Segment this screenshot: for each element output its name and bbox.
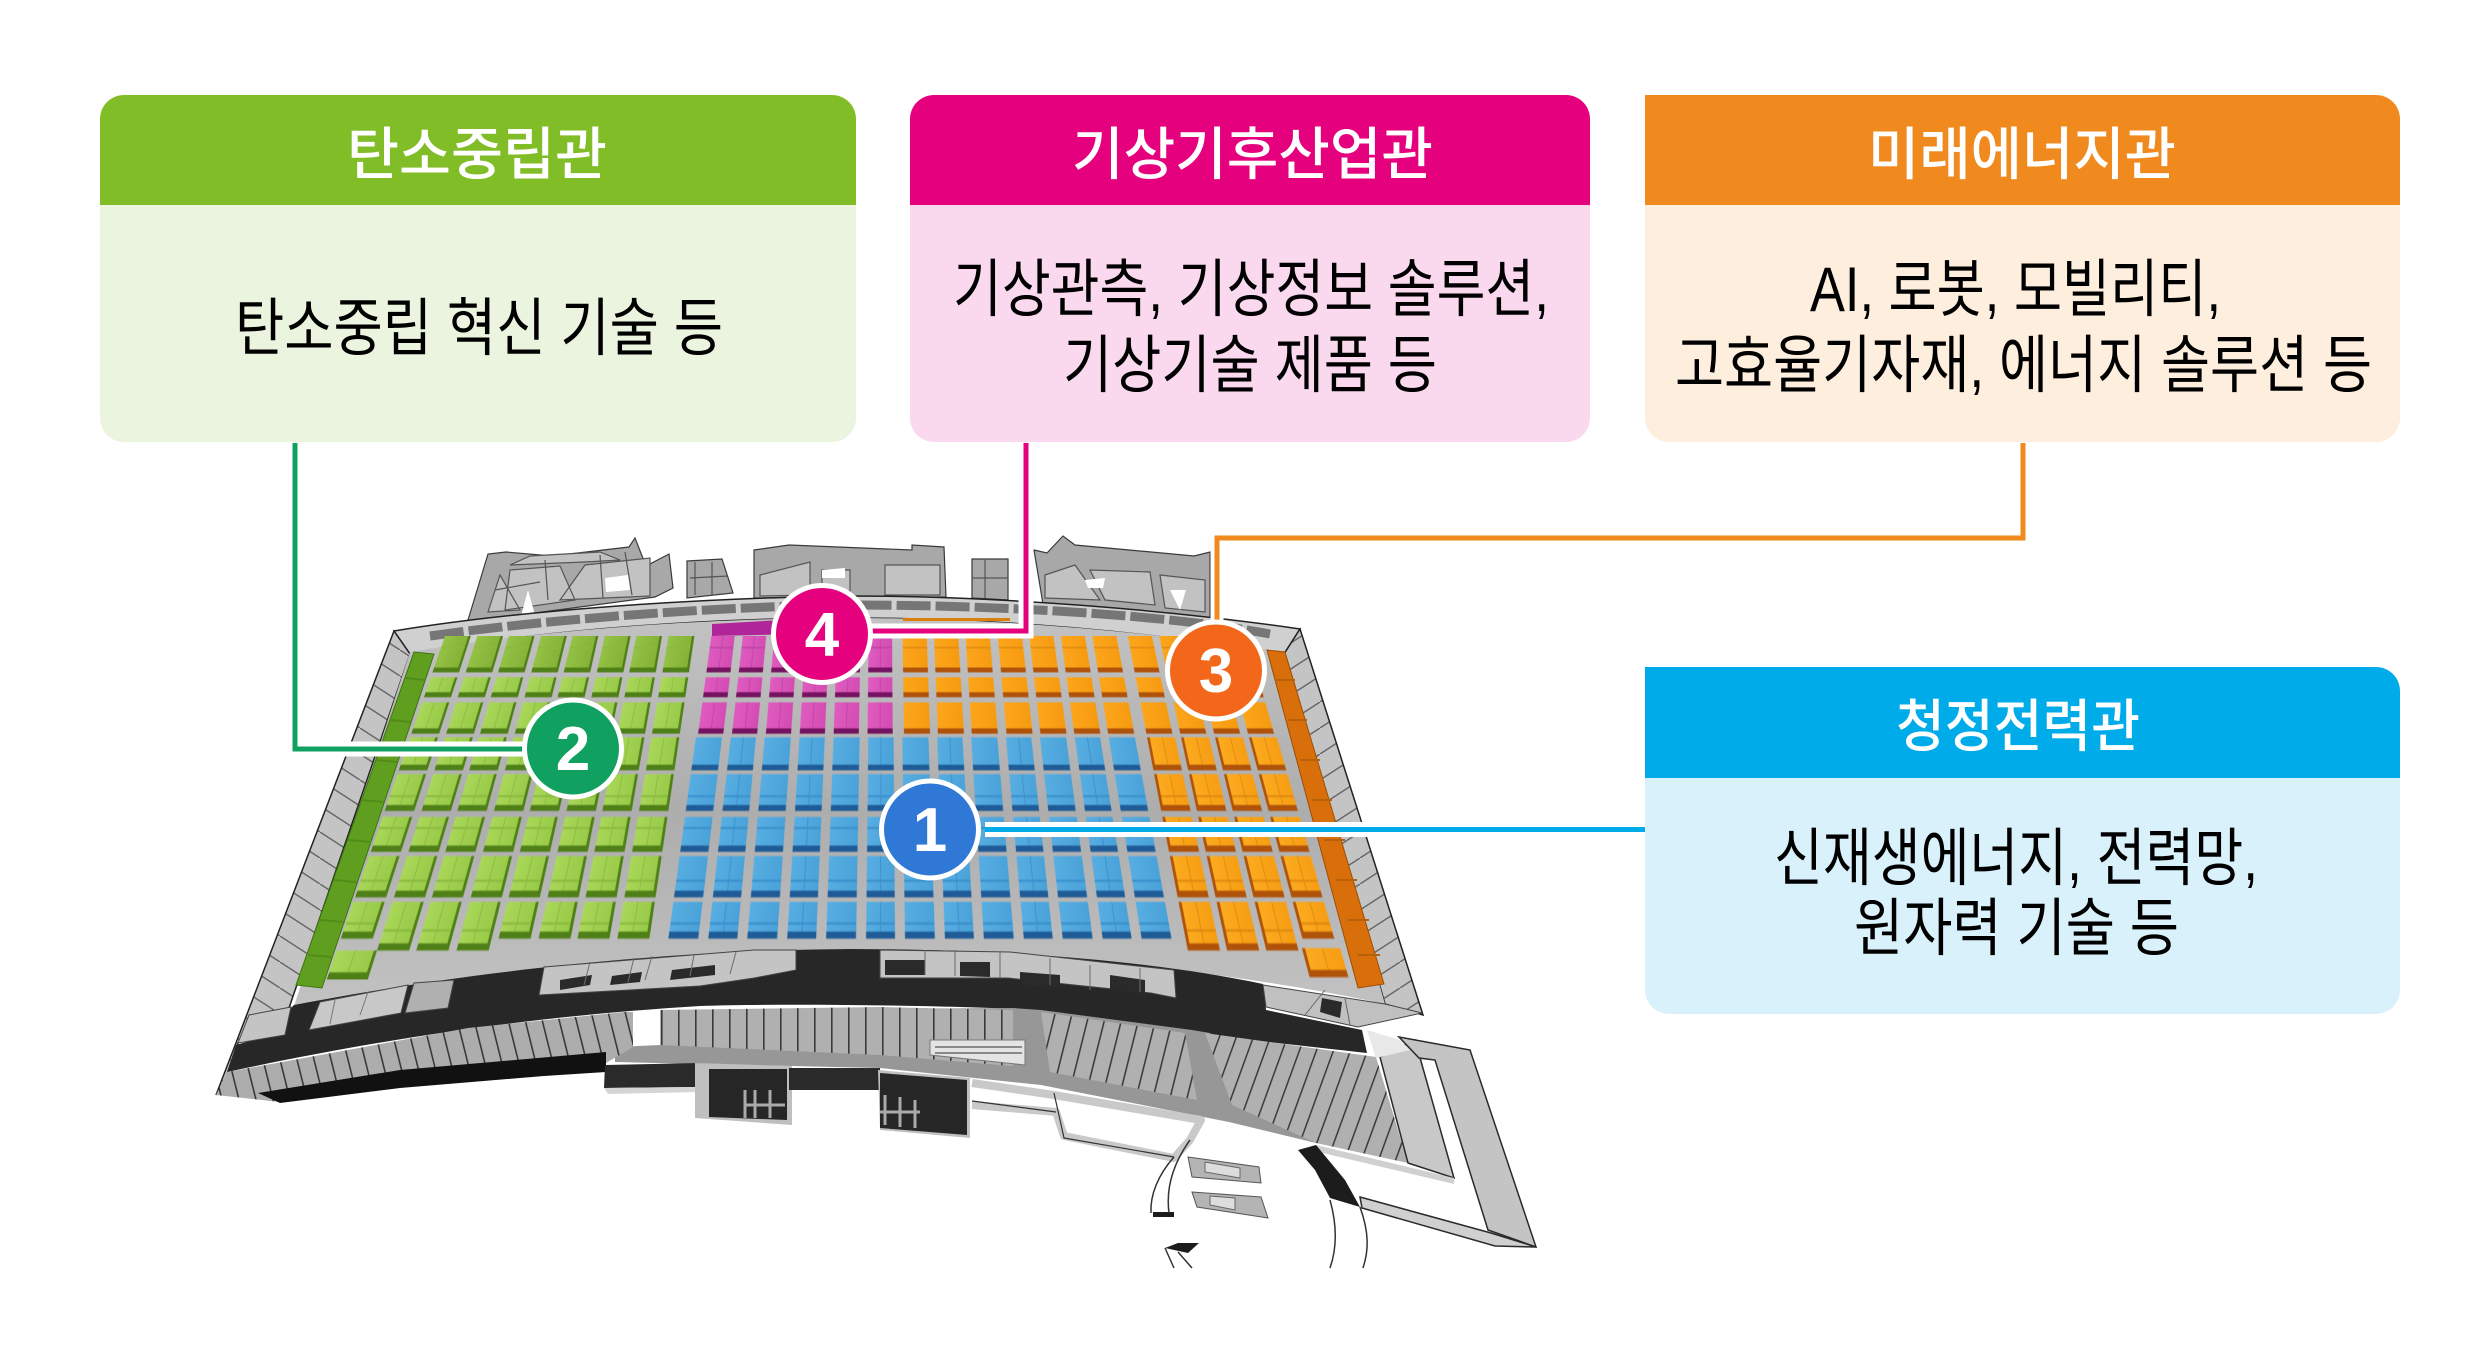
speckled walkway base <box>615 1008 1316 1143</box>
zone: 미래에너지관 upper orange booths <box>902 636 1274 734</box>
zone: 미래에너지관 lower orange booths <box>1146 736 1335 952</box>
rooms set into the corridor band <box>238 950 1422 1043</box>
marker 2 <box>524 700 622 797</box>
heading: 기상기후산업관 <box>1072 123 1433 187</box>
dark corridor band <box>227 949 1367 1072</box>
description <box>953 255 1549 401</box>
marker 1 <box>882 781 978 878</box>
description: 기상관측, 기상정보 솔루션, <box>953 255 1549 325</box>
top row accent bars <box>712 618 1010 636</box>
panel: 청정전력관 <box>1645 667 2400 1014</box>
description: 기상기술 제품 등 <box>1063 331 1437 401</box>
ribbed roof: right section <box>1205 1033 1408 1163</box>
description: 신재생에너지, 전력망, <box>1774 824 2258 894</box>
ribbed roof: left section <box>216 1012 633 1103</box>
connector: blue <box>985 822 1645 837</box>
lower black rooms <box>604 1063 970 1138</box>
marker 4 <box>774 586 870 682</box>
description: 고효율기자재, 에너지 솔루션 등 <box>1675 331 2372 401</box>
marker 3: 3 <box>1199 637 1233 706</box>
heading: 청정전력관 <box>1896 695 2140 759</box>
ribbed roof: middle section <box>1041 1012 1197 1100</box>
heading: 미래에너지관 <box>1868 123 2176 187</box>
back rooms behind the hall <box>468 536 1210 622</box>
marker 4: 4 <box>805 600 840 670</box>
exhibition hall floor <box>294 618 1385 1006</box>
marker 3 <box>1168 622 1264 719</box>
small annex rooms and arcs <box>1151 1140 1367 1268</box>
description: AI, 로봇, 모빌리티, <box>1810 255 2221 325</box>
single green booth at front <box>327 951 377 980</box>
top wall band of the hall <box>394 596 1300 654</box>
panel: 탄소중립관 <box>100 95 856 442</box>
orange long strip along the right wall <box>1267 650 1384 988</box>
far right wing <box>1310 1030 1536 1247</box>
outline frames below the walkway <box>972 1083 1201 1158</box>
left side wall <box>216 631 410 1095</box>
connector: green <box>295 443 530 749</box>
zone: 탄소중립관 green booths <box>340 636 694 952</box>
green long strip along the left wall <box>296 652 434 988</box>
zone: 기상기후산업관 magenta booths <box>698 636 893 734</box>
heading: 탄소중립관 <box>347 123 607 187</box>
panel: 미래에너지관 <box>1645 95 2400 442</box>
right side wall <box>1284 629 1423 1015</box>
panel: 기상기후산업관 <box>910 95 1590 442</box>
connector: orange <box>1217 443 2023 625</box>
description <box>1774 824 2258 964</box>
single orange booth at front <box>1302 948 1348 977</box>
black entrance ramp <box>1298 1145 1360 1207</box>
ribbed roof: centre section <box>660 1007 1013 1066</box>
marker 1: 1 <box>913 796 947 865</box>
description: 원자력 기술 등 <box>1854 894 2179 964</box>
connector: magenta <box>860 443 1026 631</box>
description <box>1675 255 2372 401</box>
exhibition booth blocks <box>327 636 1349 980</box>
zone: 청정전력관 blue booths <box>668 736 1172 940</box>
skylight detail on roof <box>930 1040 1025 1065</box>
description: 탄소중립 혁신 기술 등 <box>235 294 723 364</box>
marker 2: 2 <box>556 715 590 784</box>
